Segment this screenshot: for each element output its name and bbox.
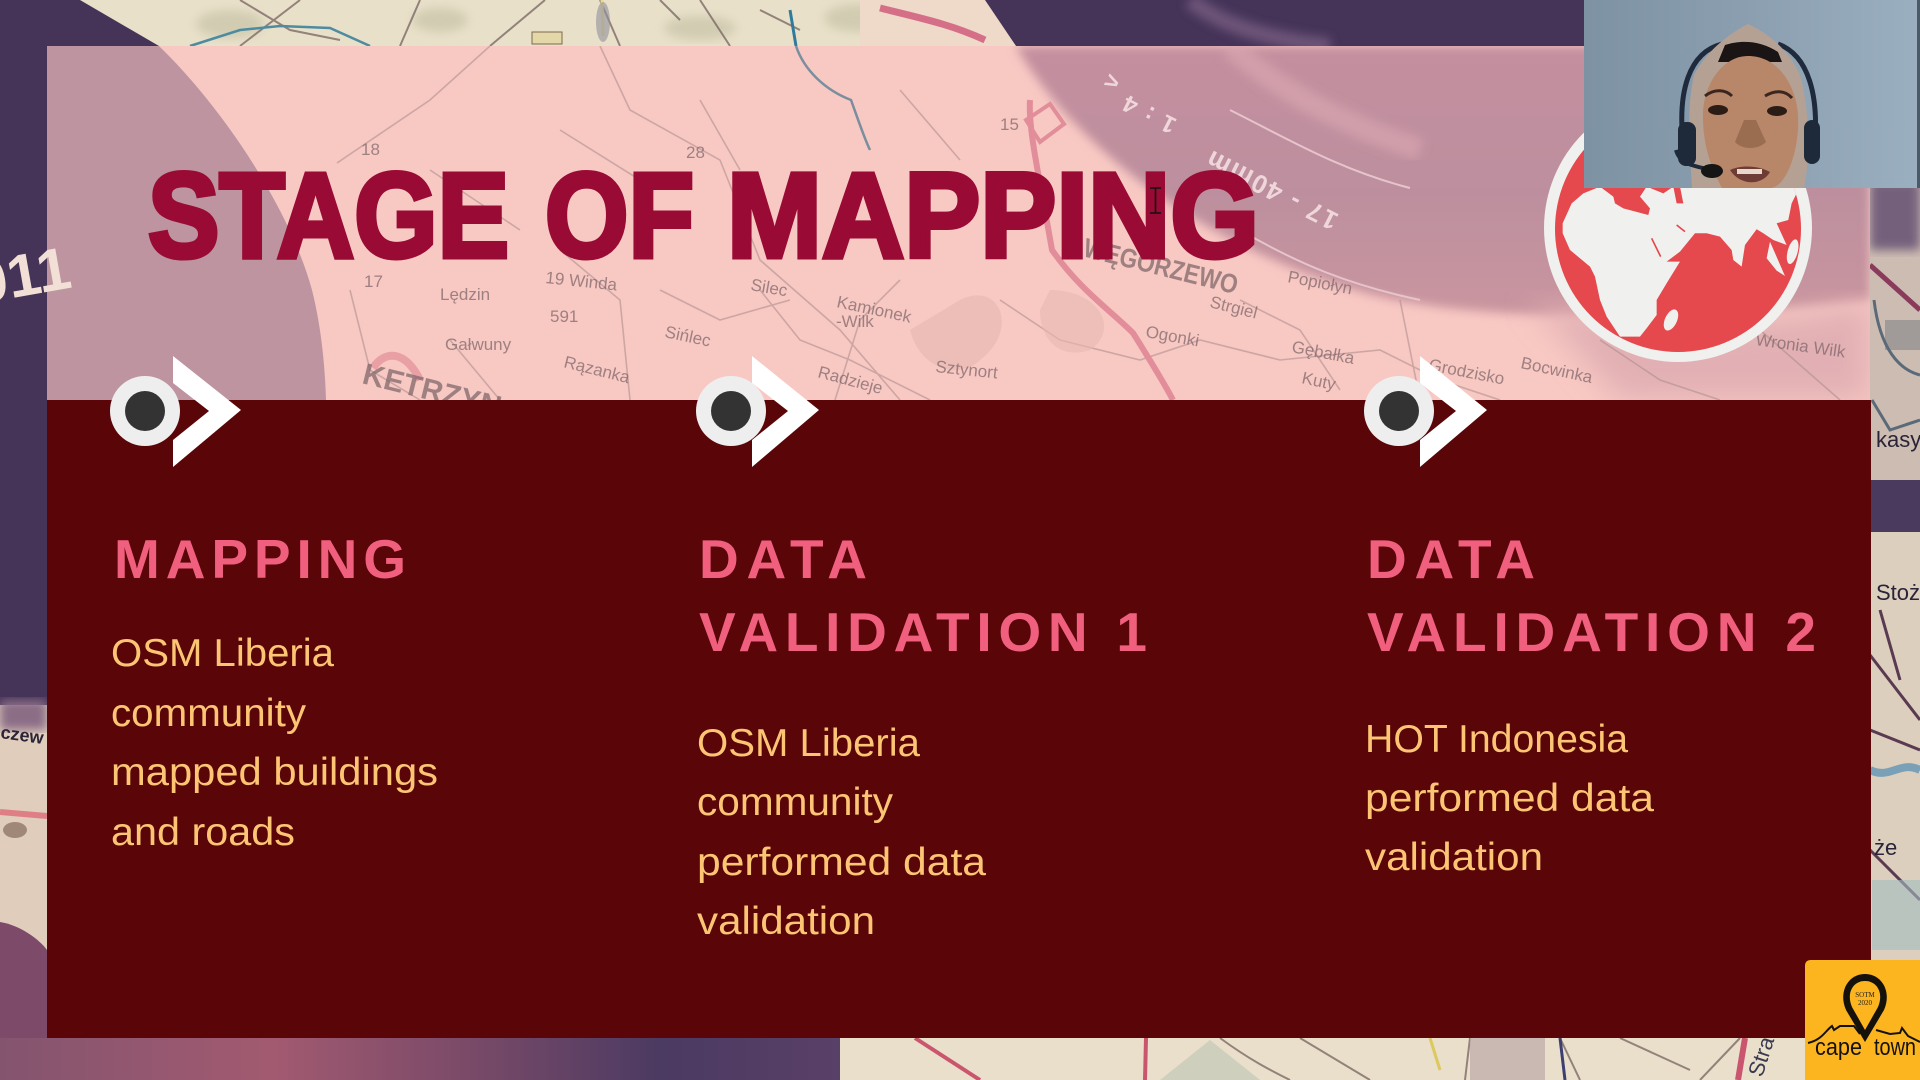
heading: VALIDATION 1 <box>699 601 1147 663</box>
logo: SOTM 2020 Cape Town: SOTM <box>1855 991 1875 999</box>
title: STAGE <box>148 147 509 283</box>
background photo: map and lens: kasy <box>1876 427 1920 452</box>
heading: DATA <box>699 528 867 590</box>
logo: SOTM 2020 Cape Town: 2020 <box>1858 999 1872 1007</box>
title: OF <box>545 147 694 283</box>
heading: DATA <box>1367 528 1535 590</box>
logo: SOTM 2020 Cape Town <box>1805 960 1920 1080</box>
map labels: Wronia Wilk <box>1754 330 1847 362</box>
heading <box>1367 528 1816 663</box>
heading: VALIDATION 2 <box>1367 601 1816 663</box>
map labels: Sztynort <box>935 357 999 383</box>
wordmark: cape <box>1815 1034 1862 1061</box>
map labels: Bocwinka <box>1519 353 1595 387</box>
title <box>148 147 1259 283</box>
background photo: map and lens: czew <box>0 722 46 748</box>
map labels: Ogonki <box>1144 322 1201 350</box>
map labels: KETRZYN <box>359 358 505 424</box>
map lines <box>337 46 1840 400</box>
map labels: Gębałka <box>1290 337 1357 368</box>
body text: and roads <box>111 811 295 854</box>
wordmark <box>1815 1034 1916 1061</box>
map labels: 15 <box>1000 115 1019 134</box>
face <box>1703 56 1798 188</box>
map labels: Lędzin <box>440 285 490 304</box>
map labels: 17 <box>364 272 383 291</box>
body text: community <box>697 781 894 824</box>
map labels: Popiołyn <box>1286 267 1354 298</box>
icon: record and chevron <box>1364 356 1487 467</box>
column: mapping <box>110 356 438 854</box>
map labels: Kuty <box>1300 368 1338 394</box>
map labels: Strgiel <box>1208 292 1259 323</box>
map labels: Sińlec <box>663 322 713 351</box>
map labels: 19 Winda <box>545 268 619 295</box>
pin <box>1843 974 1887 1042</box>
icon: text cursor <box>1150 188 1161 213</box>
panel: dark red content background <box>47 400 1871 1038</box>
heading <box>699 528 1147 663</box>
icon: record and chevron <box>110 356 241 467</box>
column: data validation 1 <box>696 356 1147 943</box>
lens engraving: < <box>1100 66 1125 97</box>
body text: community <box>111 692 307 735</box>
map labels: Radzieje <box>816 363 885 398</box>
lens region <box>1016 46 1870 316</box>
lens engraving <box>1104 74 1338 228</box>
map labels: Rązanka <box>562 352 632 387</box>
body text: HOT Indonesia <box>1365 718 1628 761</box>
headset band <box>1682 44 1816 150</box>
heading: MAPPING <box>114 528 406 590</box>
body text: validation <box>697 900 875 943</box>
map labels: Grodzisko <box>1427 355 1506 389</box>
body text: validation <box>1365 836 1543 879</box>
background photo: map and lens: Strad <box>1743 1022 1783 1080</box>
map labels: Kamionek <box>835 292 914 327</box>
map labels: 28 <box>686 143 705 162</box>
map labels <box>359 115 1847 424</box>
map labels: WĘGORZEWO <box>1081 233 1241 300</box>
body text: OSM Liberia <box>697 722 920 765</box>
column: data validation 2 <box>1364 356 1816 879</box>
lens engraving: 17 - 40mm <box>1200 144 1343 236</box>
map labels: Gałwuny <box>445 335 512 354</box>
body text <box>1365 718 1654 879</box>
mountains <box>1808 1026 1920 1043</box>
title: MAPPING <box>727 147 1259 283</box>
body text: performed data <box>697 841 986 884</box>
headset cups and mic <box>1678 122 1696 166</box>
map labels: 591 <box>550 307 578 326</box>
body text: OSM Liberia <box>111 632 334 675</box>
body text: performed data <box>1365 777 1654 820</box>
lens engraving: 1 : 4 <box>1117 88 1181 139</box>
body text <box>111 632 438 854</box>
webcam: presenter <box>1584 0 1920 188</box>
map labels: 18 <box>361 140 380 159</box>
map labels: -Wilk <box>836 312 874 331</box>
panel: pink title band over map <box>47 46 1870 424</box>
left mauve circle <box>47 46 326 400</box>
icon: globe badge <box>1544 132 1812 362</box>
body text <box>697 722 986 943</box>
hijab <box>1689 24 1808 188</box>
background photo: map and lens: że <box>1874 835 1897 860</box>
map labels: Silec <box>749 275 789 300</box>
body text: mapped buildings <box>111 751 438 794</box>
icon: record and chevron <box>696 356 819 467</box>
